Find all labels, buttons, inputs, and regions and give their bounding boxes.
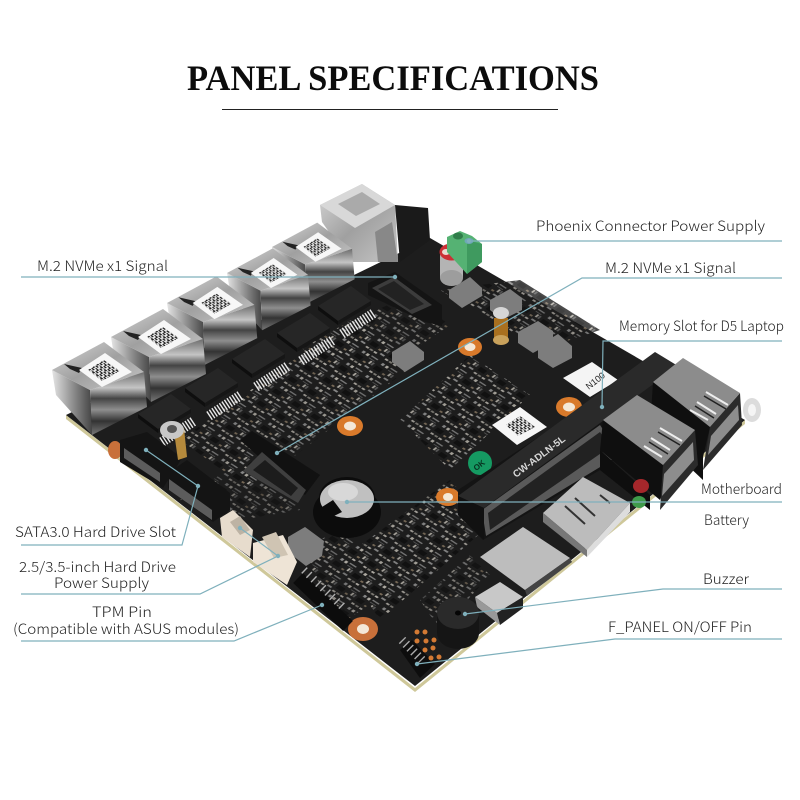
callout: Memory Slot for D5 Laptop: [600, 316, 784, 409]
gold choke: [493, 307, 509, 345]
buzzer: [437, 597, 479, 649]
callout: Phoenix Connector Power Supply: Phoenix Connector Power Supply: [536, 216, 765, 236]
callout: TPM Pin: TPM Pin: [92, 602, 152, 622]
USB-C port: [475, 582, 523, 625]
callout: F_PANEL ON/OFF Pin: F_PANEL ON/OFF Pin: [608, 617, 752, 637]
RJ45 ports: [52, 223, 355, 435]
callout: Buzzer: [463, 569, 782, 616]
RAM slot: [458, 352, 678, 540]
title: PANEL SPECIFICATIONS: [187, 58, 599, 98]
callout: Memory Slot for D5 Laptop: Memory Slot for D5 Laptop: [619, 316, 784, 336]
motherboard illustration: [52, 184, 761, 692]
callout: right M.2 NVMe x1 Signal: M.2 NVMe x1 Signal: [605, 258, 736, 278]
callout: left M.2 NVMe x1 Signal: [21, 256, 397, 279]
rear silver connector stack: [320, 184, 430, 262]
white power connectors: [220, 510, 297, 585]
callout: Motherboard Battery: Battery: [704, 510, 749, 530]
capacitor: [440, 244, 464, 286]
callout: Motherboard Battery: Motherboard: [701, 479, 782, 499]
display port connector: [543, 477, 630, 557]
N100 and QR labels: N100: [584, 370, 607, 391]
component clusters: [180, 280, 600, 630]
copper mounting holes: [108, 338, 582, 641]
top M.2 slot: [368, 272, 442, 326]
board edge: [66, 415, 745, 692]
lower M.2 slot: [240, 431, 320, 503]
callout: Phoenix Connector Power Supply: [467, 216, 782, 243]
callout: SATA3.0 Hard Drive Slot: [15, 448, 200, 545]
callout: right M.2 NVMe x1 Signal: [275, 258, 782, 455]
F_PANEL solder pads: [414, 630, 442, 660]
Ethernet transformers: [138, 286, 374, 442]
callout: Buzzer: Buzzer: [703, 569, 750, 589]
battery holder and cell: [313, 477, 381, 538]
callout: F_PANEL ON/OFF Pin: [415, 617, 782, 666]
SATA connectors: [120, 432, 230, 522]
silver mounting post: [743, 398, 761, 422]
N100 and QR labels: OK: [472, 458, 487, 473]
lower USB port: [600, 395, 698, 510]
green Phoenix connector: [447, 231, 482, 274]
upper USB port: [650, 358, 742, 480]
callout: Hard Drive Power Supply: 2.5/3.5-inch Hard Drive: [19, 557, 176, 577]
SD card slot: [480, 527, 572, 596]
screw: [160, 421, 187, 460]
N100 and QR labels: [468, 362, 618, 475]
RAM slot: CW-ADLN-5L: [511, 434, 568, 480]
callout: Hard Drive Power Supply: Power Supply: [54, 573, 149, 593]
callout: Hard Drive Power Supply: [19, 526, 280, 594]
callout: TPM Pin: [13, 602, 324, 641]
callout: left M.2 NVMe x1 Signal: M.2 NVMe x1 Signal: [37, 256, 168, 276]
inductors: [288, 277, 572, 566]
callout: SATA3.0 Hard Drive Slot: SATA3.0 Hard Drive Slot: [15, 522, 176, 542]
callout: Motherboard Battery: [345, 479, 782, 530]
pin headers: [298, 570, 435, 678]
board surface: [66, 238, 745, 686]
callout: TPM Pin: (Compatible with ASUS modules): [13, 619, 239, 639]
indicator LEDs: [632, 479, 649, 508]
